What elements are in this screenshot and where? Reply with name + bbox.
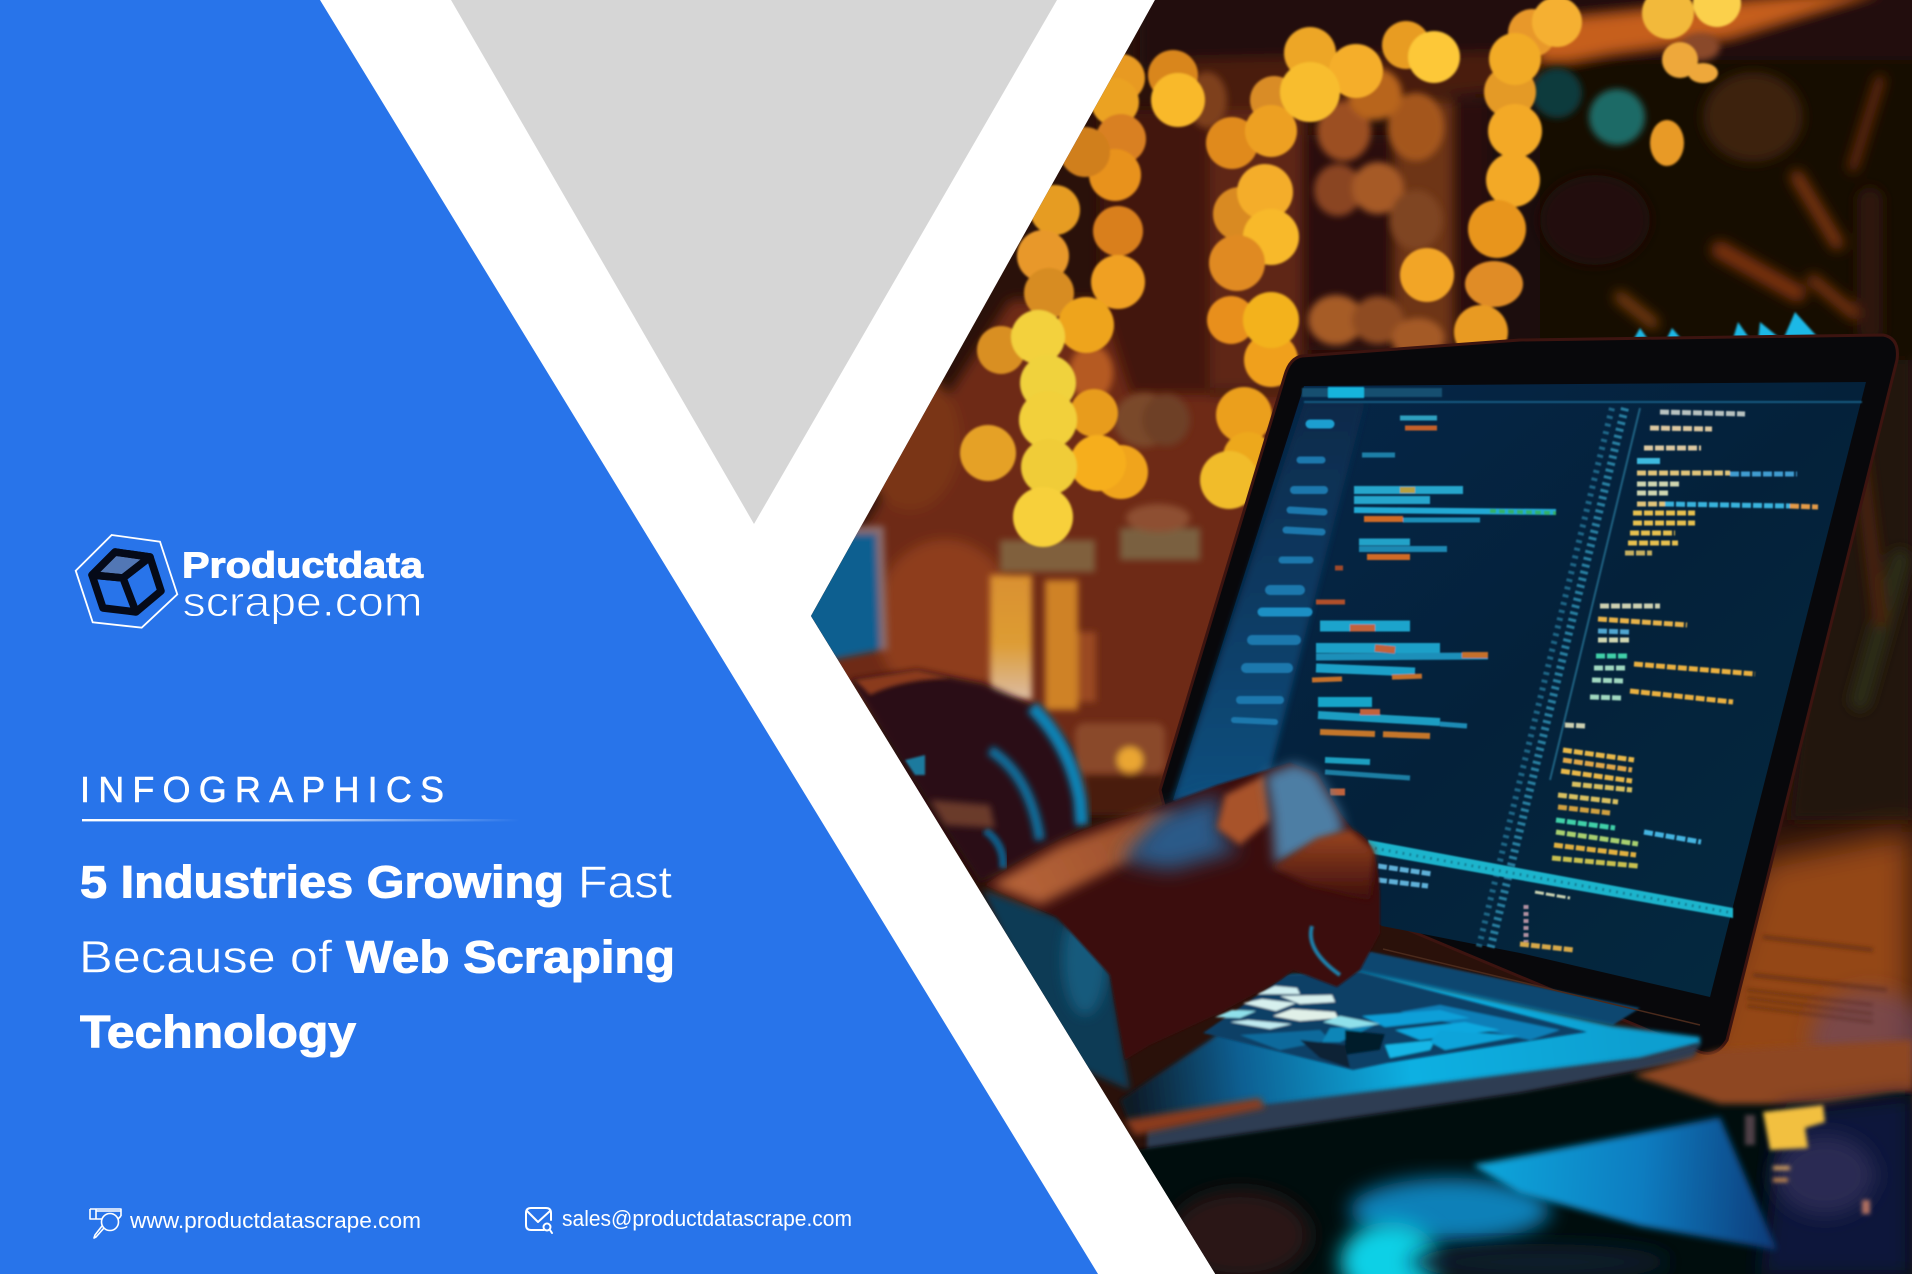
laptop screen (1173, 382, 1866, 997)
headline: Web Scraping (346, 932, 675, 982)
footer contact: email (526, 1206, 852, 1233)
underline rule (82, 819, 520, 821)
logo wordmark (182, 544, 424, 625)
keyboard deck (1120, 972, 1700, 1125)
icon: mail search (526, 1208, 552, 1233)
desk edge warm patch (1633, 1040, 1912, 1104)
footer contact: website (90, 1208, 421, 1238)
table reflection and dark foreground (1100, 1060, 1912, 1277)
eyebrow: INFOGRAPHICS: INFOGRAPHICS (80, 769, 444, 810)
icon: cube (92, 552, 161, 612)
headline: Technology (80, 1006, 356, 1058)
photo: laptop with code and bokeh lights (790, 0, 1912, 1277)
cyan glow on desk (1340, 1178, 1670, 1277)
typing hand (985, 763, 1380, 1060)
highlighted cyan line (1368, 840, 1733, 918)
navy desk right (1760, 1095, 1912, 1277)
cyan foliage above lid (1633, 311, 1818, 337)
headline (79, 856, 675, 1058)
icon: website search (90, 1209, 121, 1238)
front lip (1147, 1043, 1700, 1152)
sidebar (1234, 424, 1330, 722)
sleeve (983, 890, 1130, 1090)
logo wordmark: scrape.com (182, 578, 422, 625)
amber reflections (1745, 1105, 1870, 1214)
screen sidebar glow (1173, 403, 1365, 800)
dim bokeh (1000, 33, 1720, 572)
laptop lid (1160, 335, 1897, 1054)
logo wordmark: Productdata (182, 544, 424, 586)
hands and sleeve (850, 670, 1380, 1090)
tablet on desk (1473, 1117, 1777, 1250)
headline: 5 Industries Growing (80, 856, 564, 908)
dark maroon foreground (1170, 1190, 1310, 1277)
gutter dotted lines (1490, 408, 1625, 950)
background walls and pillars (790, 0, 1912, 820)
laptop hinge and base (1120, 949, 1700, 1152)
candles and blue object (800, 530, 1165, 815)
bright bokeh (960, 0, 1741, 547)
blue ring around fingertip (1311, 926, 1340, 975)
grey triangle (451, 0, 1057, 524)
code on screen (1234, 387, 1862, 950)
email text: sales@productdatascrape.com (562, 1206, 852, 1231)
keys (1203, 972, 1587, 1070)
headline: Because of (79, 932, 333, 982)
left hand (850, 670, 1083, 882)
left code (1312, 418, 1556, 792)
headline: Fast (578, 856, 673, 908)
right code (1378, 412, 1818, 950)
blue panel (0, 0, 1098, 1274)
logo hexagon outline (76, 535, 177, 628)
wooden desk glow (1660, 830, 1912, 1095)
hinge strip (1353, 951, 1640, 1025)
bottom white strip (0, 1274, 1912, 1277)
wooden desk stripes and haze (1747, 937, 1912, 1090)
logo (76, 535, 424, 628)
plant streaks (1540, 72, 1900, 700)
website text: www.productdatascrape.com (129, 1208, 421, 1233)
